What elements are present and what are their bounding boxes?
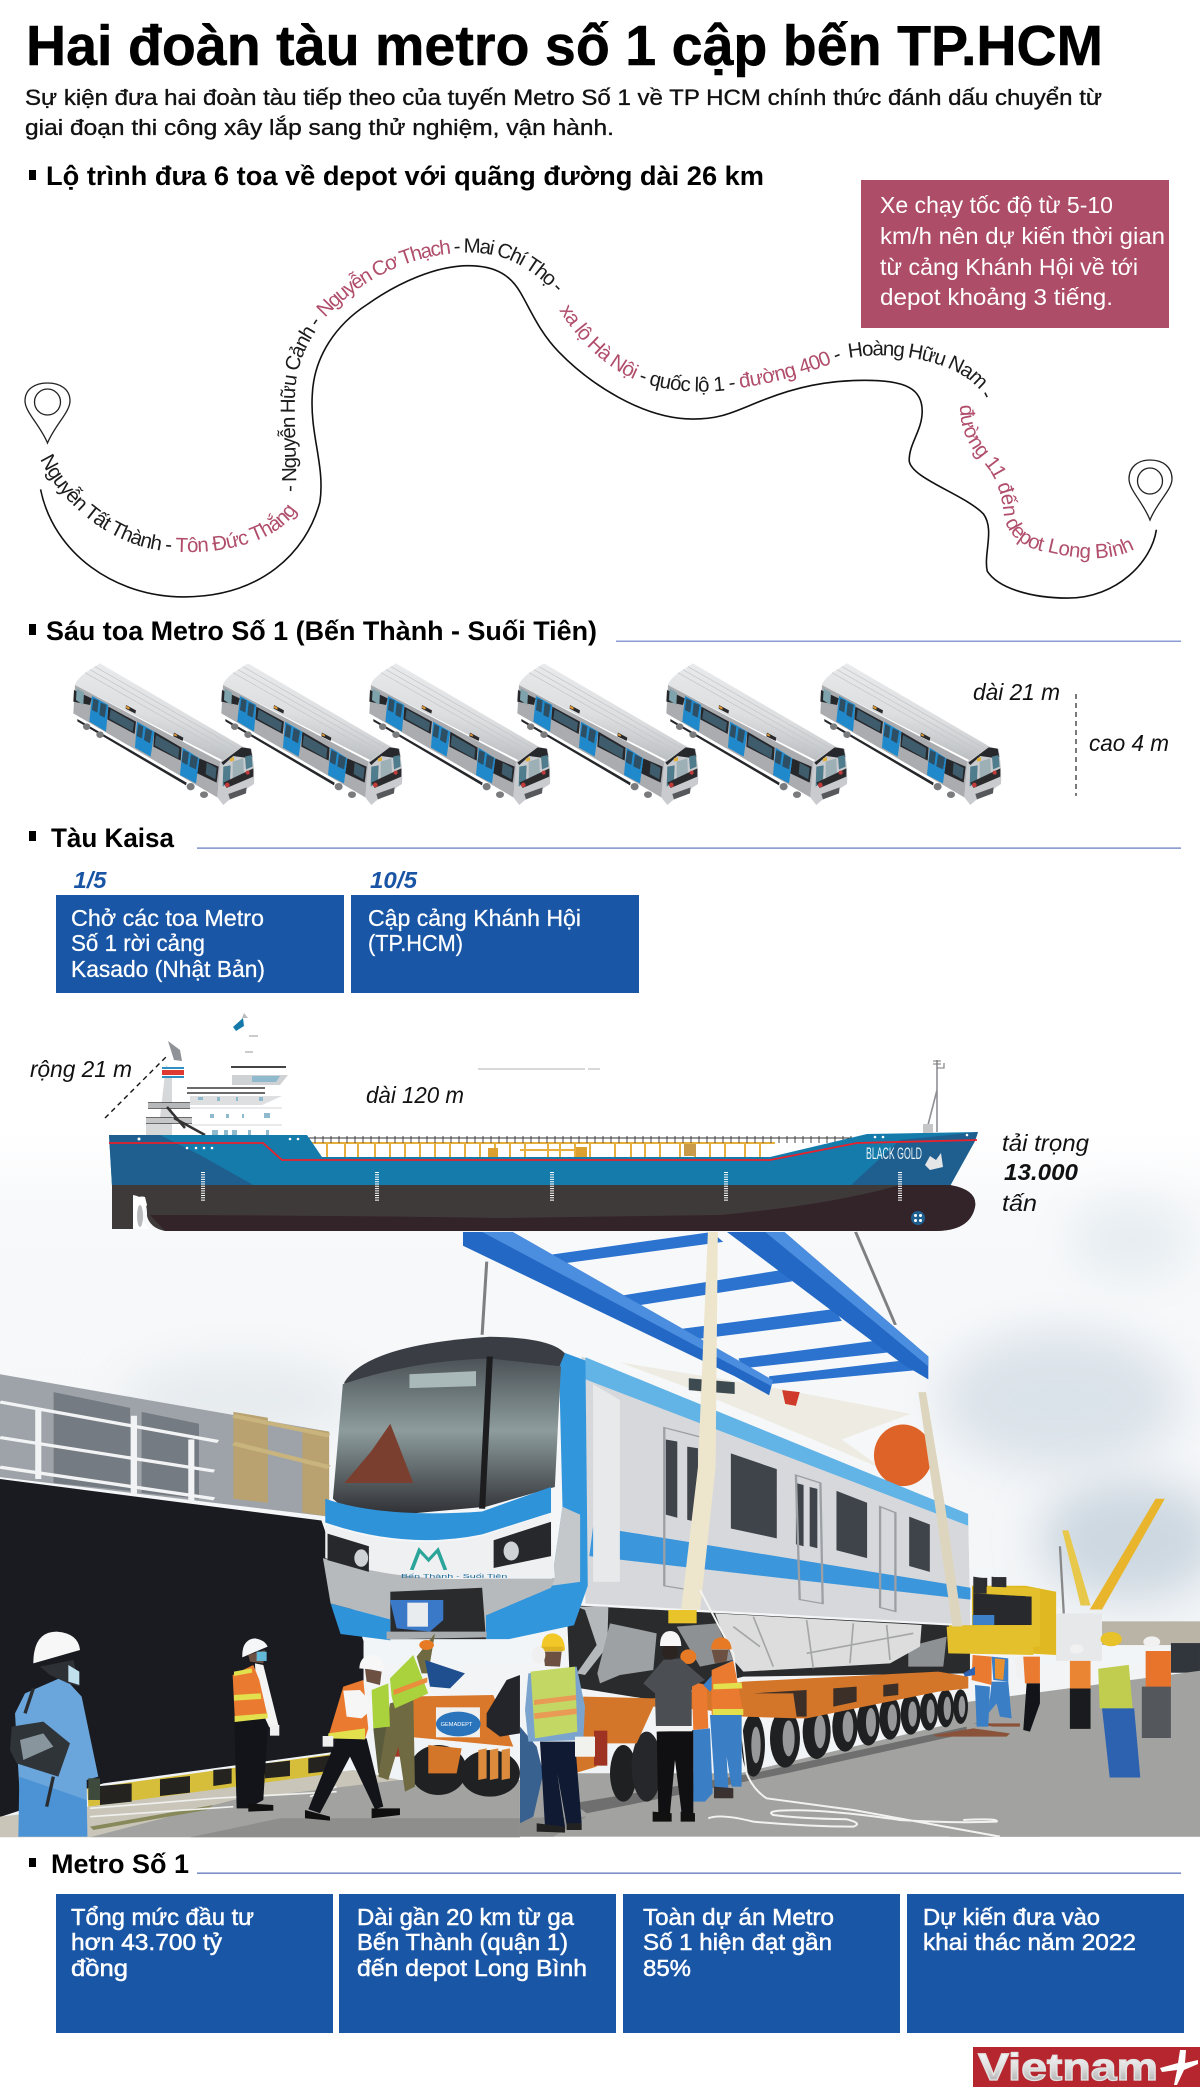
subtitle: Sự kiện đưa hai đoàn tàu tiếp theo của tuyến Metro Số 1 về TP HCM chính thức đánh dấu chuyển từ <box>25 85 1102 110</box>
ship length label: dài 120 m <box>366 1082 464 1108</box>
fact card: opening year: khai thác năm 2022 <box>923 1929 1136 1955</box>
sidewalk <box>0 1770 400 1837</box>
timeline: 1/5: Số 1 rời cảng <box>71 930 205 956</box>
fact card: investment: Tổng mức đầu tư <box>71 1904 254 1930</box>
grass and rope <box>90 1805 213 1830</box>
subtitle: giai đoạn thi công xây lắp sang thử nghiệm, vận hành. <box>25 115 614 140</box>
fact card: length: Bến Thành (quận 1) <box>357 1929 568 1955</box>
callout: speed: km/h nên dự kiến thời gian <box>880 223 1165 249</box>
car dimensions: cao 4 m <box>1089 730 1169 756</box>
ship width label: rộng 21 m <box>30 1056 132 1082</box>
wrapped bogie <box>715 1613 922 1672</box>
bogie <box>577 1607 608 1675</box>
trailer deck <box>575 1672 968 1773</box>
route street names: đường 11 đến depot Long Bình <box>960 406 1134 562</box>
heading: Metro No.1 <box>29 1849 1181 1879</box>
fact card: investment: đồng <box>71 1955 128 1981</box>
route street names: xa lộ Hà Nội - quốc lộ 1 - đường 400 - <box>559 304 840 395</box>
fact card: progress: Toàn dự án Metro <box>643 1904 834 1930</box>
timeline: 10/5: (TP.HCM) <box>368 930 463 956</box>
train cab: Bến Thành - Suối Tiên <box>401 1573 508 1579</box>
asphalt centre <box>520 1712 1040 1837</box>
ship tonnage label: 13.000 <box>1004 1159 1078 1185</box>
route curve <box>41 266 1156 598</box>
bow mast <box>923 1060 944 1133</box>
fact card: length: đến depot Long Bình <box>357 1955 587 1981</box>
draft scales <box>203 1172 900 1201</box>
ship tonnage label: tấn <box>1002 1190 1037 1216</box>
ship hull left <box>0 1479 364 1817</box>
hull lower dark <box>112 1185 975 1231</box>
fact card: investment: hơn 43.700 tỷ <box>71 1929 223 1955</box>
rudder and propeller <box>133 1197 150 1229</box>
train cab <box>323 1337 588 1640</box>
quay, curb and undercarriage left section <box>0 1754 520 1837</box>
heading: Kaisa ship: Tàu Kaisa <box>51 823 175 853</box>
red line <box>109 1140 977 1160</box>
truck <box>949 1577 1056 1655</box>
fact card: opening year <box>907 1894 1184 2033</box>
six metro cars <box>73 663 1001 805</box>
callout: speed: từ cảng Khánh Hội về tới <box>880 254 1138 280</box>
quay ground, far right <box>949 1671 1200 1837</box>
subtitle <box>25 85 1102 140</box>
route street names: - Nguyễn Hữu Cảnh - <box>277 319 318 492</box>
bow thruster <box>911 1211 925 1225</box>
callout: speed: Xe chạy tốc độ từ 5-10 <box>880 192 1113 218</box>
fact card: progress: 85% <box>643 1955 691 1981</box>
ship width label <box>30 1055 168 1118</box>
trailer front: GEMADEPT <box>441 1722 473 1728</box>
timeline: 1/5: Kasado (Nhật Bản) <box>71 956 265 982</box>
ship name: BLACK GOLD <box>866 1144 922 1163</box>
workers in lime vests <box>372 1633 465 1792</box>
fact card: investment <box>56 1894 333 2033</box>
title: Hai đoàn tàu metro số 1 cập bến TP.HCM <box>26 14 1103 78</box>
worker in orange vest, blue trousers <box>703 1637 743 1798</box>
timeline: 1/5 <box>56 867 344 993</box>
ship illustration <box>109 1013 978 1231</box>
heading: six cars: Sáu toa Metro Số 1 (Bến Thành - Suối Tiên) <box>46 616 597 646</box>
deck railing and cargo rack <box>300 1136 860 1159</box>
hull portholes <box>138 1134 968 1149</box>
trailer front <box>393 1695 520 1797</box>
callout: speed: depot khoảng 3 tiếng. <box>880 284 1113 310</box>
train side <box>582 1356 970 1626</box>
curb <box>87 1754 333 1807</box>
worker in blue coverall <box>10 1632 100 1837</box>
rusty chains on ground <box>933 1723 1020 1737</box>
route street names: Nguyễn Cơ Thạch - Mai Chí Thọ - <box>316 238 560 317</box>
fact card: length: Dài gần 20 km từ ga <box>357 1904 574 1930</box>
dark chassis under train <box>567 1605 970 1700</box>
route street names <box>40 238 1134 562</box>
timeline: 10/5: Cập cảng Khánh Hội <box>368 905 581 931</box>
fact card: progress <box>623 1894 900 2033</box>
wrapped package and bracket <box>387 1600 487 1639</box>
rope on ground <box>700 1590 1000 1837</box>
vessel behind train <box>620 1362 932 1489</box>
ship superstructure <box>146 1013 600 1135</box>
heading: six cars <box>29 616 1181 646</box>
icon: end pin <box>1129 460 1172 520</box>
distant workers, right edge <box>1070 1632 1171 1777</box>
worker in grey hoodie <box>643 1631 705 1822</box>
worker in orange vest, walking <box>305 1655 400 1821</box>
route street names: Hoàng Hữu Nam - <box>848 340 988 398</box>
car dimensions <box>973 679 1169 796</box>
heading: route: Lộ trình đưa 6 toa về depot với quãng đường dài 26 km <box>46 161 764 191</box>
fact card: length <box>339 1894 616 2033</box>
ship cabin and railings <box>0 1374 329 1517</box>
workers behind trailer, right <box>963 1641 1040 1732</box>
callout: speed <box>861 180 1169 328</box>
route street names: Nguyễn Tất Thành - Tôn Đức Thắng <box>40 454 298 552</box>
logo: Vietnam+: Vietnam <box>978 2047 1158 2089</box>
heading: Kaisa ship <box>29 823 1181 853</box>
number plate <box>575 1737 595 1757</box>
worker behind, orange vest <box>680 1649 713 1802</box>
fact card: progress: Số 1 hiện đạt gần <box>643 1929 832 1955</box>
timeline: 1/5: 1/5 <box>74 867 108 893</box>
icon: start pin <box>25 383 70 443</box>
ship tonnage label: tải trọng <box>1002 1130 1089 1156</box>
photo: train unloaded at port <box>0 1133 1200 1837</box>
trailer wheels <box>610 1689 968 1802</box>
fact card: opening year: Dự kiến đưa vào <box>923 1904 1100 1930</box>
anchor <box>925 1153 943 1170</box>
car dimensions: dài 21 m <box>973 679 1060 705</box>
timeline: 10/5 <box>351 867 639 993</box>
background crane and port <box>1056 1499 1200 1673</box>
timeline: 1/5: Chở các toa Metro <box>71 905 264 931</box>
lifting straps <box>681 1232 963 1629</box>
worker in orange vest, standing <box>233 1638 279 1812</box>
worker in lime vest, yellow hat <box>520 1633 585 1833</box>
backpack <box>487 1675 520 1737</box>
hull waterline blue <box>109 1132 978 1186</box>
lifting frame <box>463 1232 928 1395</box>
ship tonnage label <box>1002 1130 1089 1216</box>
timeline: 10/5: 10/5 <box>370 867 418 893</box>
asphalt left <box>90 1780 520 1837</box>
logo: Vietnam+ <box>973 2047 1200 2089</box>
heading: Metro No.1: Metro Số 1 <box>51 1849 189 1879</box>
truck cab and side <box>947 1577 1040 1655</box>
